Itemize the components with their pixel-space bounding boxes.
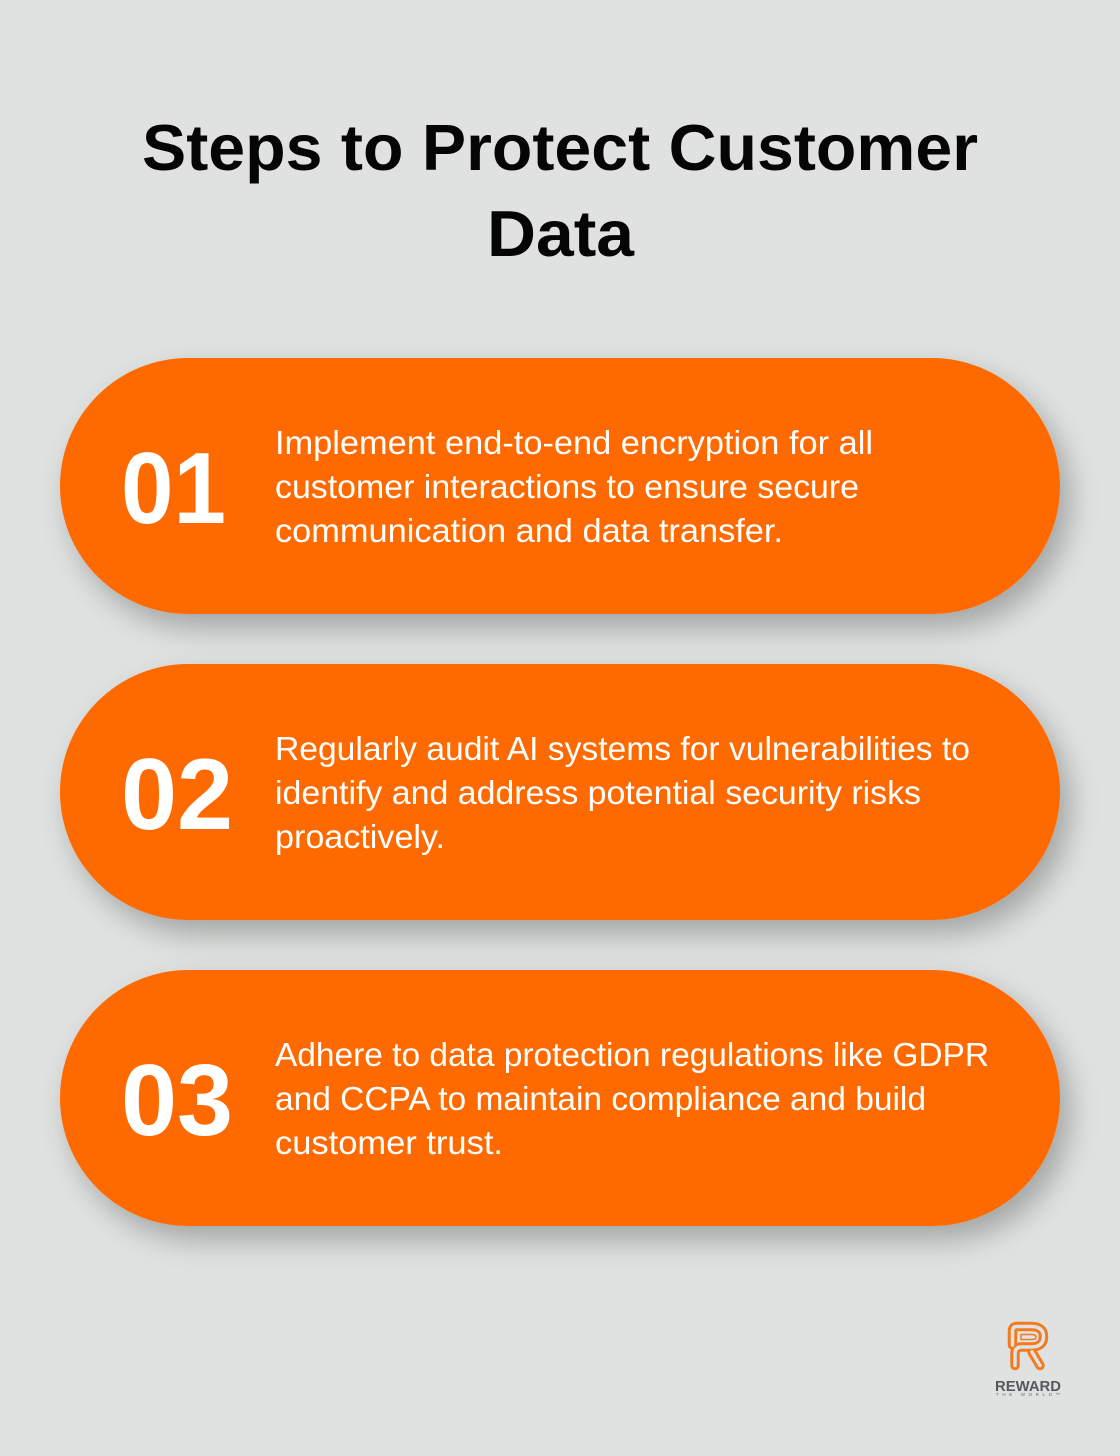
panel: step 01: [60, 358, 1060, 614]
brand name: REWARD: [995, 1378, 1061, 1395]
text: step 03 description: [275, 1036, 989, 1161]
logo: Reward the World: [995, 1326, 1061, 1397]
text: step 03 description: Adhere to data protection regulations like GDPR: [275, 1036, 989, 1073]
text: step 01 description: customer interactions to ensure secure: [275, 468, 859, 505]
text: step 01 description: [275, 424, 873, 549]
pill 02: [60, 664, 1060, 920]
text: step 02 description: Regularly audit AI systems for vulnerabilities to: [275, 730, 970, 767]
title: Steps to Protect Customer: [142, 111, 978, 184]
number 02: 02: [121, 739, 233, 851]
text: step 02 description: proactively.: [275, 818, 445, 855]
text: step 02 description: identify and address potential security risks: [275, 774, 921, 811]
number 01: 01: [121, 433, 226, 545]
panel: step 02: [60, 664, 1060, 920]
text: step 01 description: Implement end-to-end encryption for all: [275, 424, 873, 461]
text: step 01 description: communication and data transfer.: [275, 512, 783, 549]
number 03: 03: [121, 1045, 233, 1157]
pill 03: [60, 970, 1060, 1226]
panel: step 03: [60, 970, 1060, 1226]
title: Data: [487, 197, 635, 270]
pill 01: [60, 358, 1060, 614]
icon: R mark: [1012, 1326, 1044, 1366]
text: step 03 description: and CCPA to maintain compliance and build: [275, 1080, 926, 1117]
brand tagline: THE WORLD™: [996, 1392, 1060, 1397]
title: [142, 111, 978, 270]
text: step 03 description: customer trust.: [275, 1124, 503, 1161]
text: step 02 description: [275, 730, 970, 855]
